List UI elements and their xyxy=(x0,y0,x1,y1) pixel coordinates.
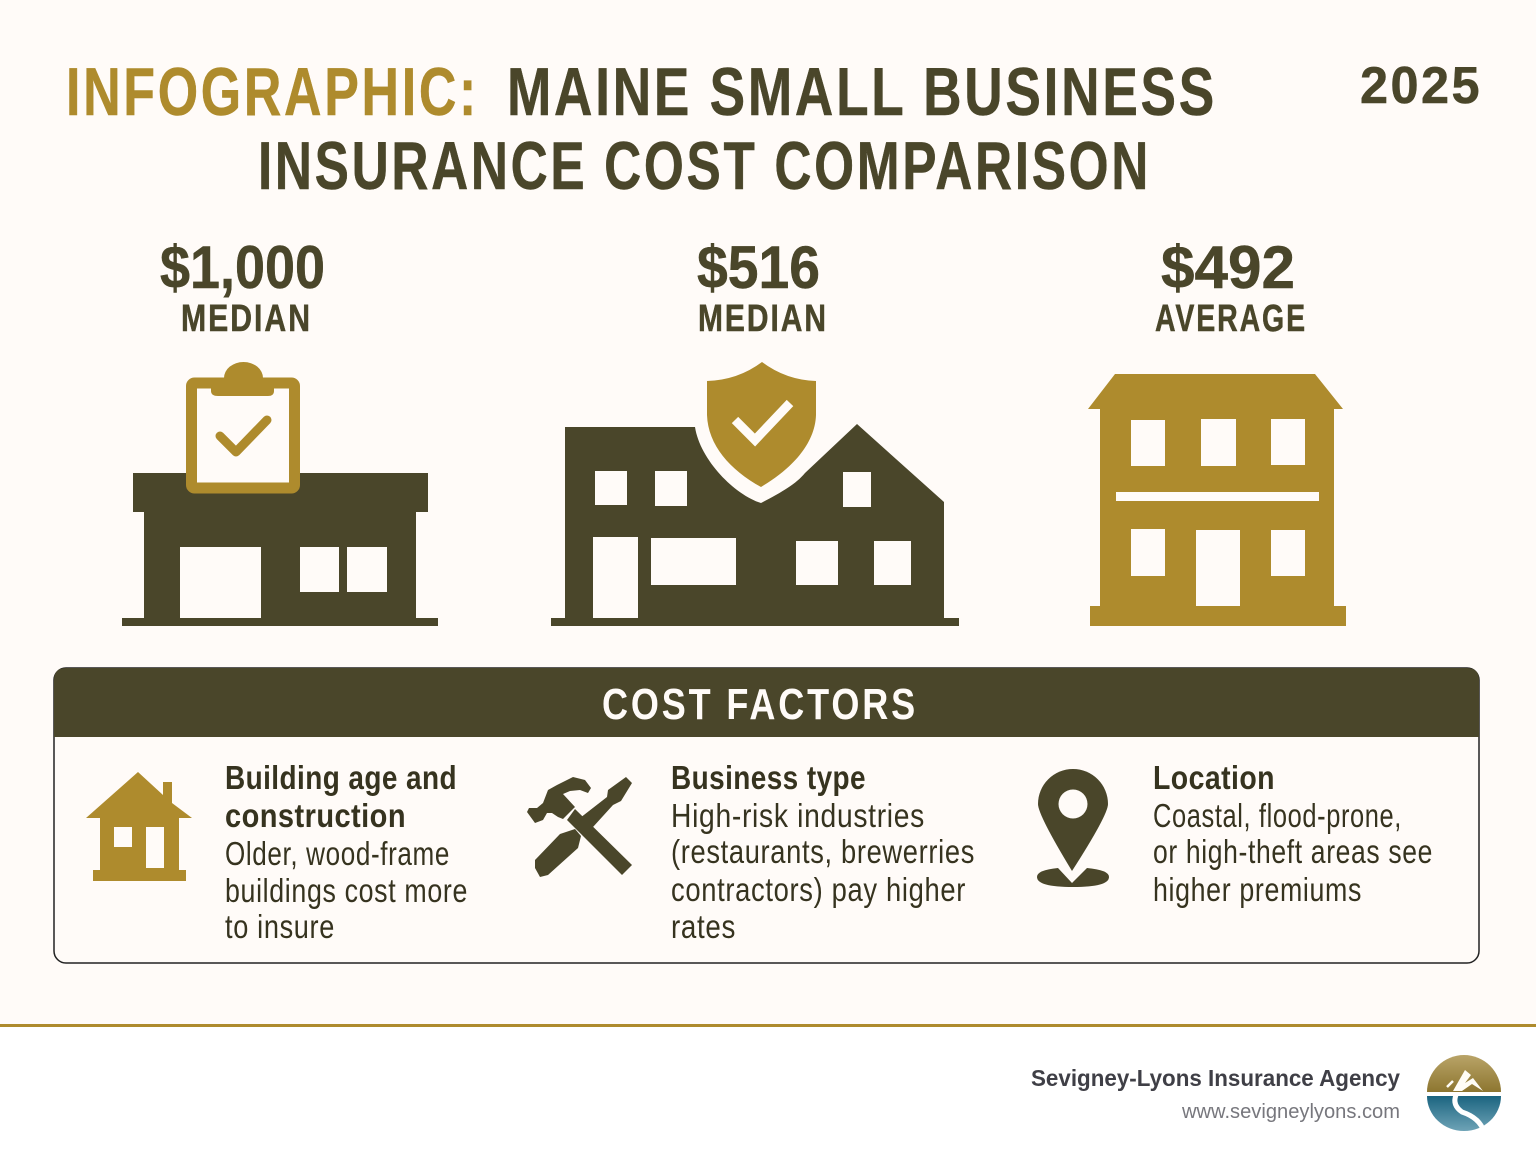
icon: storefront with clipboard xyxy=(122,362,438,626)
panel heading: COST FACTORS xyxy=(602,680,918,729)
stat: $492 average: $492 xyxy=(1161,234,1295,301)
icon: clipboard check xyxy=(192,362,294,488)
text: building age: to insure xyxy=(225,908,335,945)
text: location xyxy=(1153,759,1433,908)
text: business type: rates xyxy=(671,908,736,945)
text: building age: buildings cost more xyxy=(225,872,468,909)
footer xyxy=(0,1024,1536,1154)
stat: $516 median: $516 xyxy=(697,234,820,301)
title xyxy=(66,54,1217,204)
text: business type: High-risk industries xyxy=(671,797,925,834)
icon: house with shield xyxy=(551,362,959,626)
text: business type xyxy=(671,759,975,945)
stat: $492 average xyxy=(1155,234,1307,340)
text: business type: contractors) pay higher xyxy=(671,871,966,908)
text: location: Coastal, flood-prone, xyxy=(1153,797,1402,834)
icon: hammer and screwdriver xyxy=(527,777,632,877)
text: business type: Business type xyxy=(671,759,866,796)
stat: $1,000 median: $1,000 xyxy=(160,234,325,301)
stat: $1,000 median: MEDIAN xyxy=(181,298,312,340)
text: building age: Older, wood-frame xyxy=(225,835,450,872)
text: location: higher premiums xyxy=(1153,871,1362,908)
title: MAINE SMALL BUSINESS xyxy=(507,54,1217,130)
stat: $492 average: AVERAGE xyxy=(1155,298,1307,340)
text: building age: Building age and xyxy=(225,759,457,796)
icon: agency logo xyxy=(1427,1055,1501,1132)
footer agency name: Sevigney-Lyons Insurance Agency xyxy=(1031,1065,1400,1091)
text: building age xyxy=(225,759,468,945)
icon: house xyxy=(86,772,192,881)
panel header xyxy=(54,668,1479,737)
year: 2025 xyxy=(1360,57,1482,115)
stat: $1,000 median xyxy=(160,234,325,340)
stat: $516 median xyxy=(697,234,828,340)
icon: location pin xyxy=(1037,769,1109,887)
stat: $516 median: MEDIAN xyxy=(698,298,828,340)
title: INFOGRAPHIC: xyxy=(66,54,479,130)
text: building age: construction xyxy=(225,797,406,834)
text: location: Location xyxy=(1153,759,1275,796)
title: INSURANCE COST COMPARISON xyxy=(258,128,1151,204)
text: location: or high-theft areas see xyxy=(1153,833,1433,870)
panel: cost factors xyxy=(54,668,1479,963)
icon: two-storey building xyxy=(1088,374,1346,626)
text: business type: (restaurants, brewerries xyxy=(671,833,975,870)
footer website: www.sevigneylyons.com xyxy=(1181,1101,1400,1123)
